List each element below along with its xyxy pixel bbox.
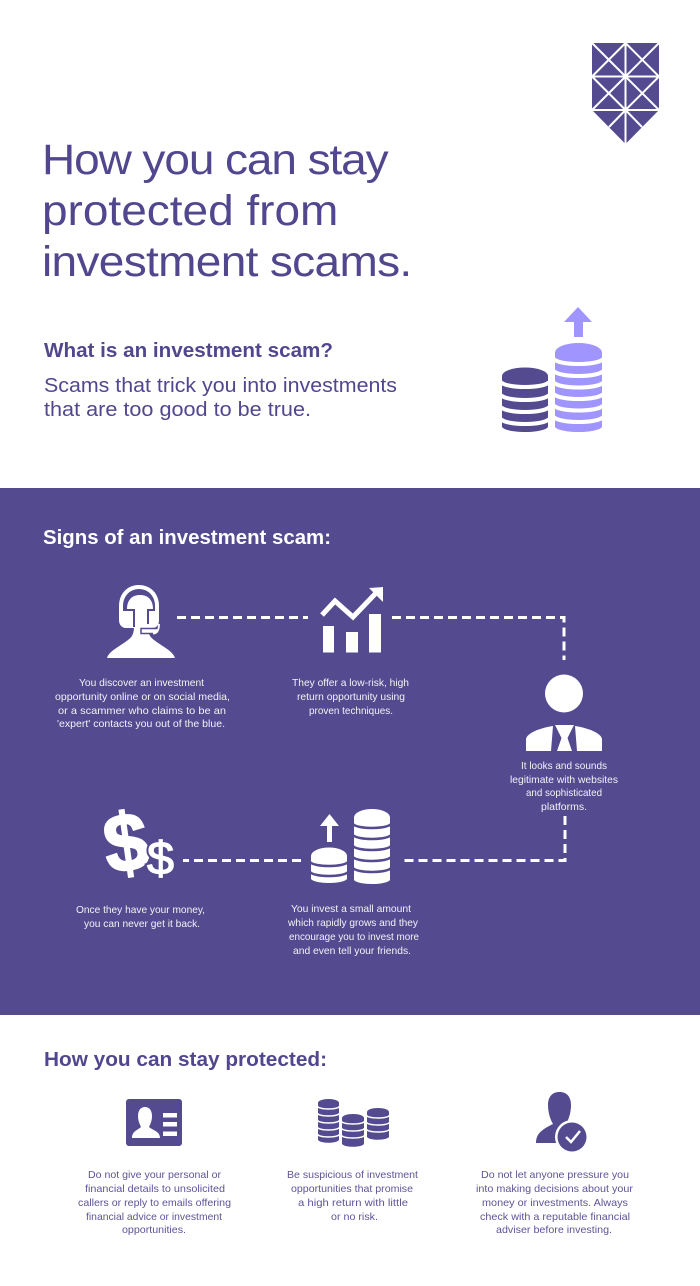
icon: businessman [526,674,602,751]
title: How you can stay [42,136,389,184]
text: looks legitimate: platforms. [541,802,587,813]
text: discover an opportunity: 'expert' contacts you out of the blue. [57,719,225,730]
title [42,136,412,286]
icon: dollar signs: $ [98,795,154,891]
text: never get money back: you can never get it back. [84,919,200,930]
text: do not be pressured: money or investments. Always [482,1198,628,1209]
text: low-risk high return: return opportunity using [297,692,405,703]
text: low-risk high return: proven techniques. [309,706,393,717]
panel: signs of an investment scam [0,488,700,1015]
text: discover an opportunity: You discover an investment [79,678,204,689]
text: do not be pressured: adviser before investing. [496,1225,612,1236]
icon: rising chart [322,587,383,652]
text: protect personal details: financial advice or investment [86,1212,222,1223]
icon: dollar signs: $ [147,832,174,884]
heading: signs: Signs of an investment scam: [43,527,331,549]
text: do not be pressured: check with a reputable financial [480,1212,630,1223]
heading: how you can stay protected: How you can stay protected: [44,1049,327,1071]
text: invest a small amount: encourage you to invest more [289,932,419,943]
icon: dollar signs: $ [147,832,174,884]
text: do not be pressured: into making decisions about your [476,1184,634,1195]
text: protect personal details: callers or reply to emails offering [78,1198,231,1209]
icon: headset agent [107,585,175,658]
dashed connector: chart to person [392,618,564,660]
text: protect personal details [78,1170,231,1236]
icon: id card [126,1099,182,1146]
icon: three coin stacks [318,1099,390,1147]
icon: coins with arrow [310,809,391,884]
text: looks legitimate [510,761,618,813]
intro text: what is an investment scam: What is an investment scam? [44,340,333,362]
text: looks legitimate: It looks and sounds [521,761,607,772]
dashed connector: expert to chart [177,616,308,619]
text: invest a small amount: which rapidly grows and they [287,918,419,929]
text: never get money back [76,905,205,930]
icon: verified person [536,1092,589,1154]
text: low-risk high return [292,678,409,717]
title: protected from [42,187,338,235]
text: invest a small amount [287,904,419,957]
text: low-risk high return: They offer a low-risk, high [292,678,409,689]
intro text: what is an investment scam: that are too good to be true. [44,399,311,421]
text: do not be pressured: Do not let anyone pressure you [481,1170,629,1181]
text: looks legitimate: and sophisticated [526,788,602,799]
text: invest a small amount: You invest a small amount [291,904,411,915]
dashed connector: coins to dollars [183,859,301,862]
text: discover an opportunity: opportunity online or on social media, [55,692,230,703]
text: do not be pressured [476,1170,634,1236]
text: be suspicious: a high return with little [298,1198,408,1209]
text: never get money back: Once they have your money, [76,905,205,916]
text: looks legitimate: legitimate with websites [510,775,618,786]
text: discover an opportunity: or a scammer who claims to be an [58,706,226,717]
text: protect personal details: financial details to unsolicited [85,1184,225,1195]
text: be suspicious: opportunities that promise [291,1184,413,1195]
text: be suspicious: or no risk. [331,1212,378,1223]
dashed connector: person to coins [400,816,565,860]
text: invest a small amount: and even tell your friends. [293,946,411,957]
text: be suspicious: Be suspicious of investment [287,1170,418,1181]
logo: shield [592,43,659,144]
intro text: what is an investment scam: Scams that trick you into investments [44,375,397,397]
title: investment scams. [42,238,412,286]
text: discover an opportunity [55,678,230,730]
icon: growing coin stacks [501,307,603,432]
intro text: what is an investment scam [44,340,397,421]
text: protect personal details: Do not give your personal or [88,1170,222,1181]
text: be suspicious [287,1170,418,1223]
text: protect personal details: opportunities. [122,1225,186,1236]
